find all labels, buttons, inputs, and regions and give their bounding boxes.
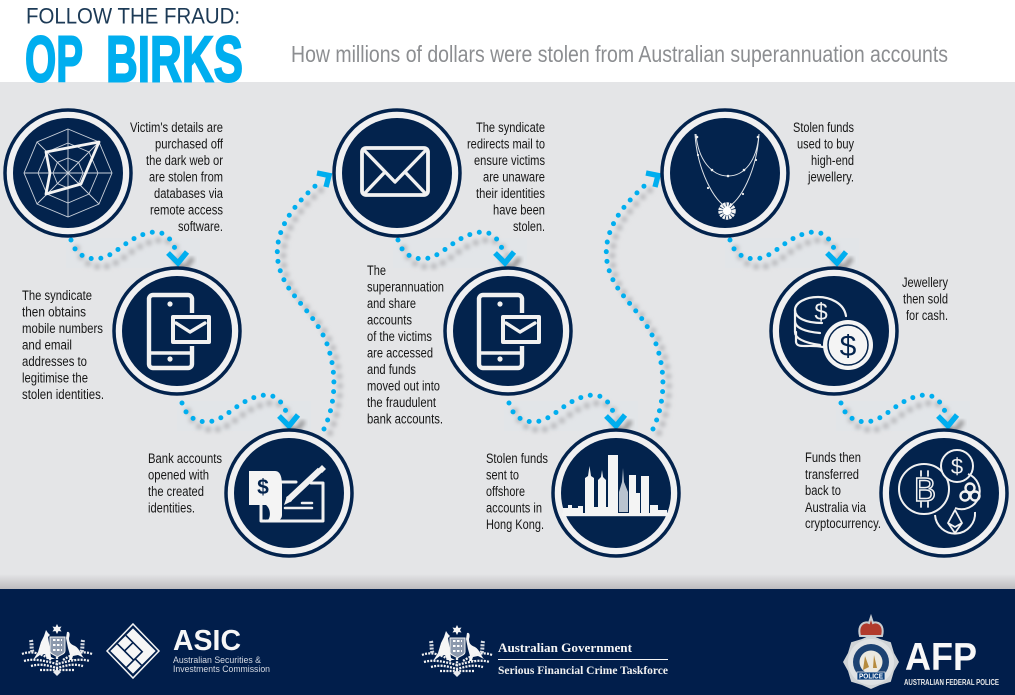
step 5 text: moved out into (367, 378, 440, 394)
step 9 text: Australia via (805, 500, 866, 515)
step 5 text: The (367, 263, 386, 278)
step 4 text: The syndicate (476, 120, 545, 135)
logo: AFP police badge (843, 617, 899, 689)
step 1 text: software. (178, 219, 223, 234)
step 2 text: legitimise the (22, 370, 88, 386)
step 1 text (130, 120, 223, 234)
step 3: cheque icon: $ (257, 476, 269, 499)
step 9: cryptocurrency icon (881, 430, 1007, 556)
step 9 text (805, 450, 881, 531)
step 5 text: bank accounts. (367, 412, 443, 426)
step 8 text: then sold (903, 292, 948, 306)
step 5 text: superannuation (367, 280, 444, 294)
step 4: envelope icon (334, 110, 460, 236)
step 1 text: are stolen from (149, 170, 223, 184)
step 4 text: have been (493, 202, 545, 218)
step 8: coins icon (771, 268, 897, 394)
logo: ASIC wordmark (173, 625, 270, 675)
step 4 text: stolen. (513, 219, 545, 234)
step 4 text: redirects mail to (467, 136, 545, 152)
logo: AFP police badge: POLICE (859, 674, 883, 680)
step 7: necklace icon (662, 110, 788, 236)
step 3 text: the created (148, 484, 204, 499)
logo: Australian Government wordmark: Serious Financial Crime Taskforce (498, 663, 669, 677)
step 3 text (148, 451, 222, 516)
step 7 text: Stolen funds (793, 120, 854, 135)
step 7 text: used to buy (797, 136, 854, 152)
title: BIRKS (106, 22, 243, 96)
connector: step 7 to step 8 (725, 232, 859, 269)
logo: ASIC wordmark: Australian Securities & (173, 655, 262, 666)
step 5 text: are accessed (367, 346, 433, 360)
step 2 text: mobile numbers (22, 321, 103, 336)
logo: coat of arms (Australian Government) (422, 625, 492, 677)
step 5 text: of the victims (367, 329, 432, 344)
step 9: cryptocurrency icon: B (914, 471, 936, 508)
step 6 text: Hong Kong. (486, 517, 544, 532)
logo: ASIC wordmark: ASIC (173, 625, 241, 657)
step 5 text: the fraudulent (367, 395, 436, 410)
connector: step 5 to step 6 (504, 395, 638, 432)
grey background panel (0, 82, 1015, 589)
step 4 text (467, 120, 545, 234)
step 3: cheque icon (226, 430, 352, 556)
step 9 text: Funds then (805, 450, 861, 465)
step 6 text: offshore (486, 484, 525, 499)
step 3 text: identities. (148, 500, 195, 516)
step 8 text (902, 275, 948, 323)
connector: step 2 to step 3 (177, 395, 311, 432)
step 3 text: Bank accounts (148, 451, 222, 466)
step 6 text (486, 451, 548, 532)
step 1 text: purchased off (155, 136, 223, 152)
step 7 text: high-end (811, 153, 854, 168)
step 2: phone and mail icon (114, 268, 240, 394)
step 5: phone and mail icon (445, 268, 571, 394)
step 2 text: then obtains (22, 304, 86, 320)
step 9 text: cryptocurrency. (805, 516, 881, 531)
step 4 text: their identities (476, 186, 545, 201)
connector: step 4 to step 5 (393, 232, 527, 269)
title (25, 4, 243, 96)
step 2 text: addresses to (22, 354, 87, 369)
step 9: cryptocurrency icon: $ (951, 454, 963, 479)
step 8 text: Jewellery (902, 275, 948, 290)
step 6 text: sent to (486, 468, 519, 482)
title: OP (25, 22, 83, 96)
title: FOLLOW THE FRAUD: (26, 4, 240, 28)
step 6 text: accounts in (486, 500, 542, 516)
step 8: coins icon: $ (840, 330, 857, 363)
step 3 text: opened with (148, 468, 209, 482)
logo: AFP wordmark: AFP (905, 636, 977, 679)
logo: ASIC diamond (107, 624, 159, 678)
step 5 text: and share (367, 296, 416, 311)
step 5 text: accounts (367, 312, 412, 328)
connector: step 8 to step 9 (836, 395, 970, 432)
logo: AFP wordmark (904, 636, 1000, 687)
step 7 text: jewellery. (807, 170, 854, 184)
step 8: coins icon: $ (814, 299, 828, 326)
step 2 text (22, 288, 104, 402)
step 4 text: are unaware (483, 170, 545, 184)
step 2 text: stolen identities. (22, 387, 104, 402)
step 5 text: and funds (367, 362, 416, 377)
step 1 text: Victim's details are (130, 120, 223, 135)
connector: step 1 to step 2 (66, 232, 200, 269)
step 9 text: back to (805, 483, 841, 498)
step 9 text: transferred (805, 467, 859, 482)
logo: Australian Government wordmark: Australian Government (498, 640, 633, 655)
step 2 text: and email (22, 338, 72, 352)
logo: ASIC wordmark: Investments Commission (173, 664, 270, 675)
step 7 text (793, 120, 854, 184)
step 4 text: ensure victims (474, 153, 545, 168)
logo: coat of arms (ASIC) (22, 624, 92, 676)
step 6: Hong Kong skyline icon (553, 430, 679, 556)
connector: step 3 up to step 4 (277, 173, 340, 433)
step 5 text (367, 263, 444, 426)
step 1 text: remote access (150, 202, 223, 218)
step 8 text: for cash. (906, 308, 948, 323)
step 6 text: Stolen funds (486, 451, 548, 466)
step 1 text: the dark web or (146, 153, 223, 168)
step 1 text: databases via (154, 186, 223, 201)
step 1: dark web radar icon (5, 110, 131, 236)
connector: step 6 up to step 7 (606, 173, 669, 433)
logo: Australian Government wordmark (498, 640, 669, 677)
footer band (0, 589, 1015, 695)
step 2 text: The syndicate (22, 288, 92, 303)
